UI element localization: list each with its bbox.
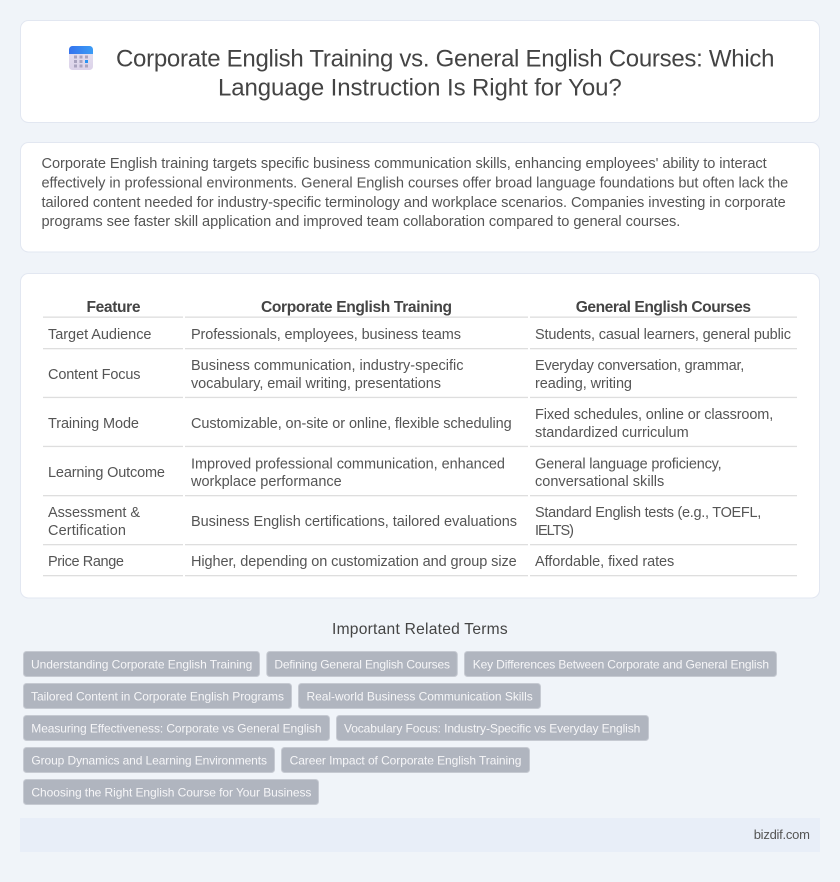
- title: Language Instruction Is Right for You?: [218, 74, 622, 102]
- row: assessment and certification: [43, 505, 797, 545]
- table header row: Corporate English Training: [261, 299, 452, 316]
- tag: real-world business communication: [298, 684, 540, 708]
- panel: title header: [20, 20, 820, 122]
- row: assessment and certification: IELTS): [535, 523, 574, 539]
- tag: group dynamics: Group Dynamics and Learning Environments: [31, 753, 267, 767]
- row: assessment and certification: Assessment &: [48, 505, 140, 521]
- tag: real-world business communication: Real-world Business Communication Skills: [306, 689, 533, 703]
- tag: key differences: [464, 652, 776, 676]
- row: price range: Affordable, fixed rates: [535, 554, 674, 570]
- tag: vocabulary focus: Vocabulary Focus: Industry-Specific vs Everyday English: [344, 721, 640, 735]
- tag: career impact: [282, 748, 530, 772]
- row: price range: Higher, depending on customization and group size: [191, 554, 517, 570]
- row: assessment and certification: Standard English tests (e.g., TOEFL,: [535, 505, 761, 521]
- footer source label: bizdif.com: [754, 827, 810, 842]
- row: content focus: Everyday conversation, grammar,: [535, 358, 744, 374]
- tag: defining general english courses: Defining General English Courses: [274, 657, 450, 671]
- intro paragraph: programs see faster skill application and improved team collaboration compared to general courses.: [42, 214, 680, 230]
- row: content focus: reading, writing: [535, 376, 632, 392]
- table header row: General English Courses: [576, 299, 751, 316]
- row: learning outcome: Learning Outcome: [48, 465, 165, 481]
- row: training mode: Customizable, on-site or online, flexible scheduling: [191, 416, 512, 432]
- row: learning outcome: [43, 456, 797, 496]
- row: price range: [43, 554, 797, 576]
- row: learning outcome: conversational skills: [535, 474, 664, 490]
- tag: career impact: Career Impact of Corporate English Training: [290, 753, 521, 767]
- footer bar: [20, 818, 820, 852]
- row: learning outcome: Improved professional communication, enhanced: [191, 456, 505, 472]
- row: content focus: [43, 358, 797, 398]
- panel: important related terms: [24, 621, 776, 804]
- tag: measuring effectiveness: Measuring Effectiveness: Corporate vs General English: [31, 721, 322, 735]
- row: training mode: Fixed schedules, online or classroom,: [535, 407, 773, 423]
- row: assessment and certification: Business English certifications, tailored evaluations: [191, 514, 517, 530]
- row: content focus: vocabulary, email writing, presentations: [191, 376, 441, 392]
- row: price range: Price Range: [48, 554, 124, 570]
- table header row: Feature: [86, 299, 141, 316]
- row: training mode: [43, 407, 797, 447]
- title: [116, 46, 774, 102]
- tag: defining general english courses: [267, 652, 457, 676]
- row: target audience: Target Audience: [48, 327, 152, 343]
- tag: choosing the right course: Choosing the Right English Course for Your Business: [31, 785, 311, 799]
- tag: vocabulary focus: [336, 716, 648, 740]
- panel: introduction: [20, 142, 820, 252]
- row: content focus: Business communication, industry-specific: [191, 358, 464, 374]
- tag: tailored content: [24, 684, 292, 708]
- intro paragraph: tailored content needed for industry-specific terminology and workplace scenarios. Companies investing in corporate: [42, 195, 786, 211]
- row: training mode: Training Mode: [48, 416, 139, 432]
- tag: choosing the right course: [24, 780, 318, 804]
- row: assessment and certification: Certification: [48, 523, 126, 539]
- row: target audience: Professionals, employees, business teams: [191, 327, 461, 343]
- related terms heading: Important Related Terms: [332, 621, 508, 638]
- panel: comparison table: [20, 274, 820, 598]
- table header row: [43, 299, 797, 318]
- row: target audience: [43, 327, 797, 349]
- row: target audience: Students, casual learners, general public: [535, 327, 791, 343]
- row: content focus: Content Focus: [48, 367, 140, 383]
- tag: understanding corporate english training: Understanding Corporate English Training: [31, 657, 252, 671]
- row: learning outcome: General language proficiency,: [535, 456, 722, 472]
- title: Corporate English Training vs. General English Courses: Which: [116, 46, 774, 72]
- intro paragraph: [42, 156, 788, 230]
- tag: tailored content: Tailored Content in Corporate English Programs: [31, 689, 284, 703]
- icon: calendar: [69, 46, 93, 70]
- intro paragraph: effectively in professional environments. General English courses offer broad language foundations but often lack the: [42, 175, 788, 191]
- intro paragraph: Corporate English training targets specific business communication skills, enhancing employees' ability to interact: [42, 156, 767, 172]
- tag: measuring effectiveness: [24, 716, 330, 740]
- tag: understanding corporate english training: [24, 652, 260, 676]
- tag: key differences: Key Differences Between Corporate and General English: [473, 657, 769, 671]
- row: training mode: standardized curriculum: [535, 425, 689, 441]
- row: learning outcome: workplace performance: [190, 474, 342, 490]
- tag: group dynamics: [24, 748, 274, 772]
